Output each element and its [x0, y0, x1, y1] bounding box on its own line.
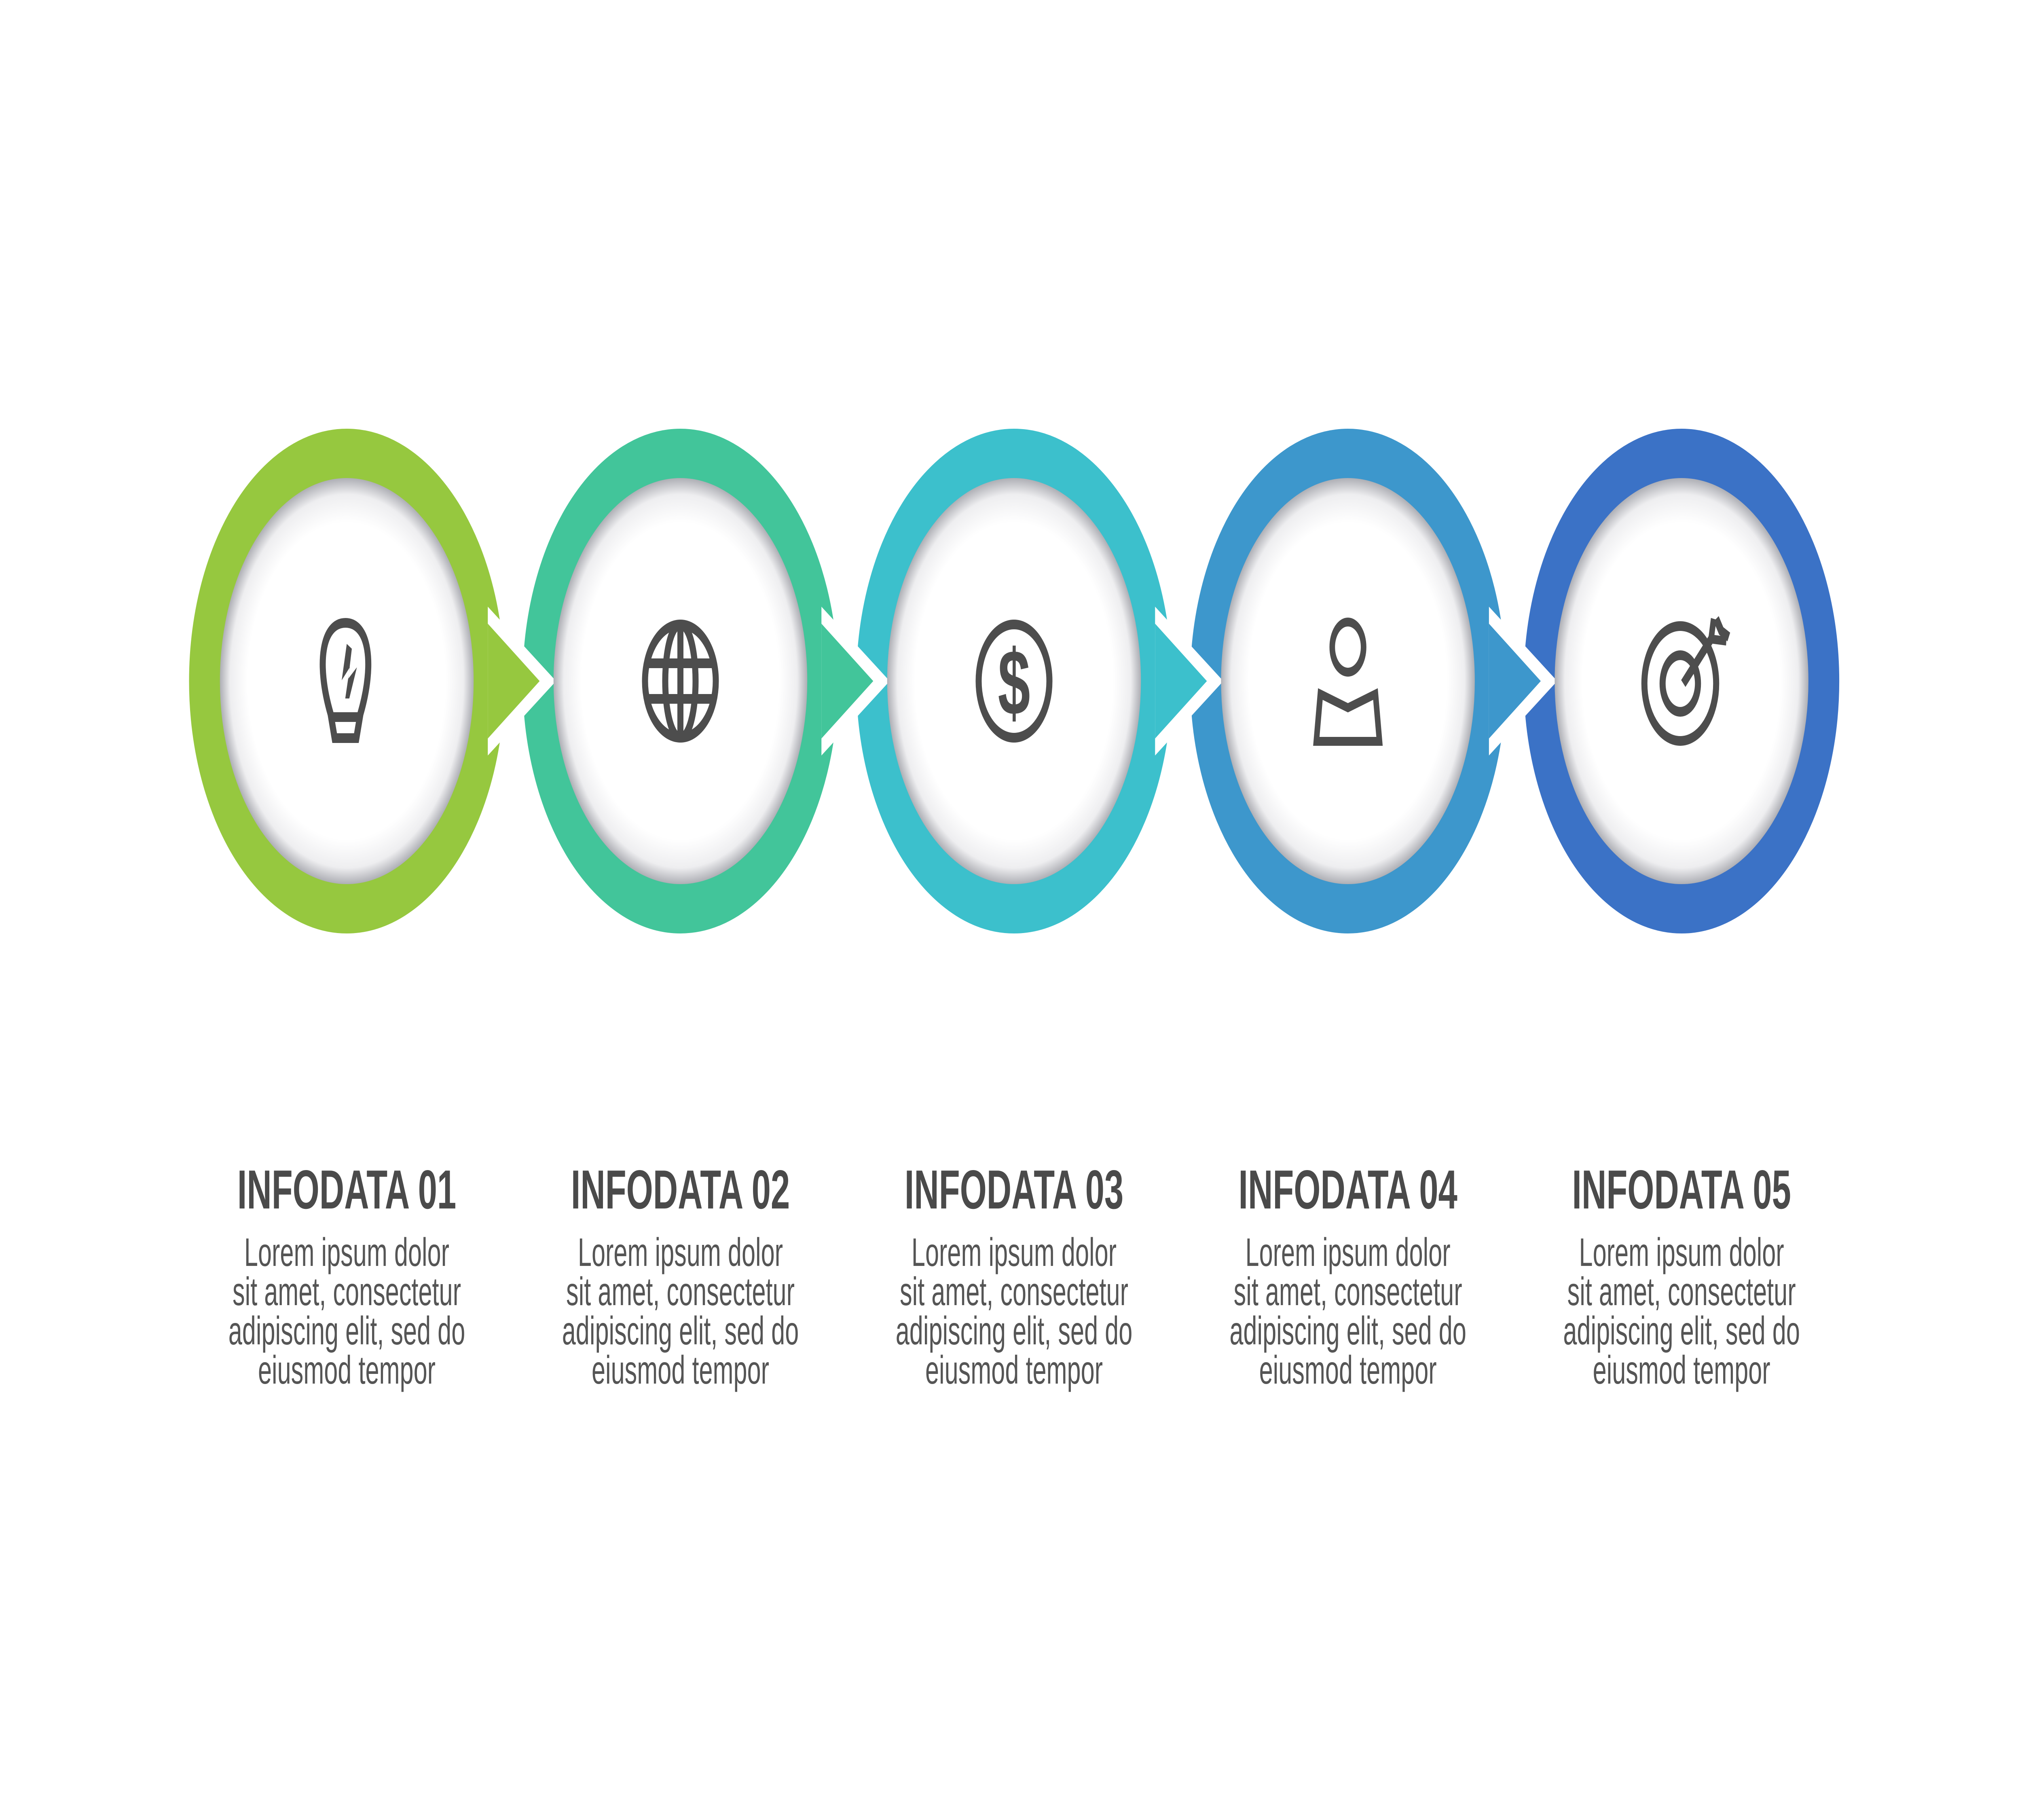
ring 5 [1540, 454, 1823, 908]
arrow 2 [821, 607, 890, 756]
caption 3 [896, 1159, 1132, 1393]
caption 5: Lorem ipsum dolor [1579, 1230, 1784, 1275]
inner circle 3 [887, 478, 1141, 884]
ring 3 [872, 454, 1156, 908]
caption 2: adipiscing elit, sed do [562, 1309, 799, 1353]
caption 5 [1563, 1159, 1800, 1393]
inner circle 5 [1555, 478, 1808, 884]
caption 5: adipiscing elit, sed do [1563, 1309, 1800, 1353]
ring 2 [538, 454, 823, 908]
icon: light bulb [323, 623, 368, 738]
caption 4: INFODATA 04 [1238, 1159, 1457, 1221]
caption 2: INFODATA 02 [571, 1159, 790, 1221]
caption 1 [228, 1159, 465, 1393]
icon: target [1644, 619, 1729, 741]
icon: dollar [979, 624, 1049, 738]
caption 2: Lorem ipsum dolor [578, 1230, 783, 1275]
caption 1: Lorem ipsum dolor [244, 1230, 449, 1275]
arrow 1 [488, 607, 556, 756]
icon: globe [645, 624, 716, 738]
inner circle 1 [220, 478, 474, 884]
caption 3: INFODATA 03 [905, 1159, 1123, 1221]
caption 2 [562, 1159, 799, 1393]
caption 4: Lorem ipsum dolor [1246, 1230, 1451, 1275]
caption 1: INFODATA 01 [237, 1159, 456, 1221]
icon: dollar: $ [998, 630, 1030, 734]
caption 3: eiusmod tempor [925, 1348, 1103, 1393]
caption 5: sit amet, consectetur [1567, 1270, 1796, 1314]
caption 4 [1229, 1159, 1466, 1393]
caption 3: sit amet, consectetur [900, 1270, 1128, 1314]
caption 3: adipiscing elit, sed do [896, 1309, 1132, 1353]
caption 4: sit amet, consectetur [1234, 1270, 1462, 1314]
arrow 4 [1489, 607, 1557, 756]
caption 2: eiusmod tempor [592, 1348, 769, 1393]
caption 1: adipiscing elit, sed do [228, 1309, 465, 1353]
arrow 3 [1155, 607, 1223, 756]
inner circle 4 [1221, 478, 1475, 884]
caption 3: Lorem ipsum dolor [912, 1230, 1117, 1275]
caption 5: eiusmod tempor [1593, 1348, 1770, 1393]
caption 1: eiusmod tempor [258, 1348, 436, 1393]
ring 1 [205, 454, 489, 908]
caption 1: sit amet, consectetur [233, 1270, 461, 1314]
inner circle 2 [554, 478, 807, 884]
caption 5: INFODATA 05 [1572, 1159, 1791, 1221]
caption 4: eiusmod tempor [1259, 1348, 1437, 1393]
caption 2: sit amet, consectetur [566, 1270, 795, 1314]
icon: person with map [1316, 622, 1379, 741]
caption 4: adipiscing elit, sed do [1229, 1309, 1466, 1353]
ring 4 [1206, 454, 1490, 908]
